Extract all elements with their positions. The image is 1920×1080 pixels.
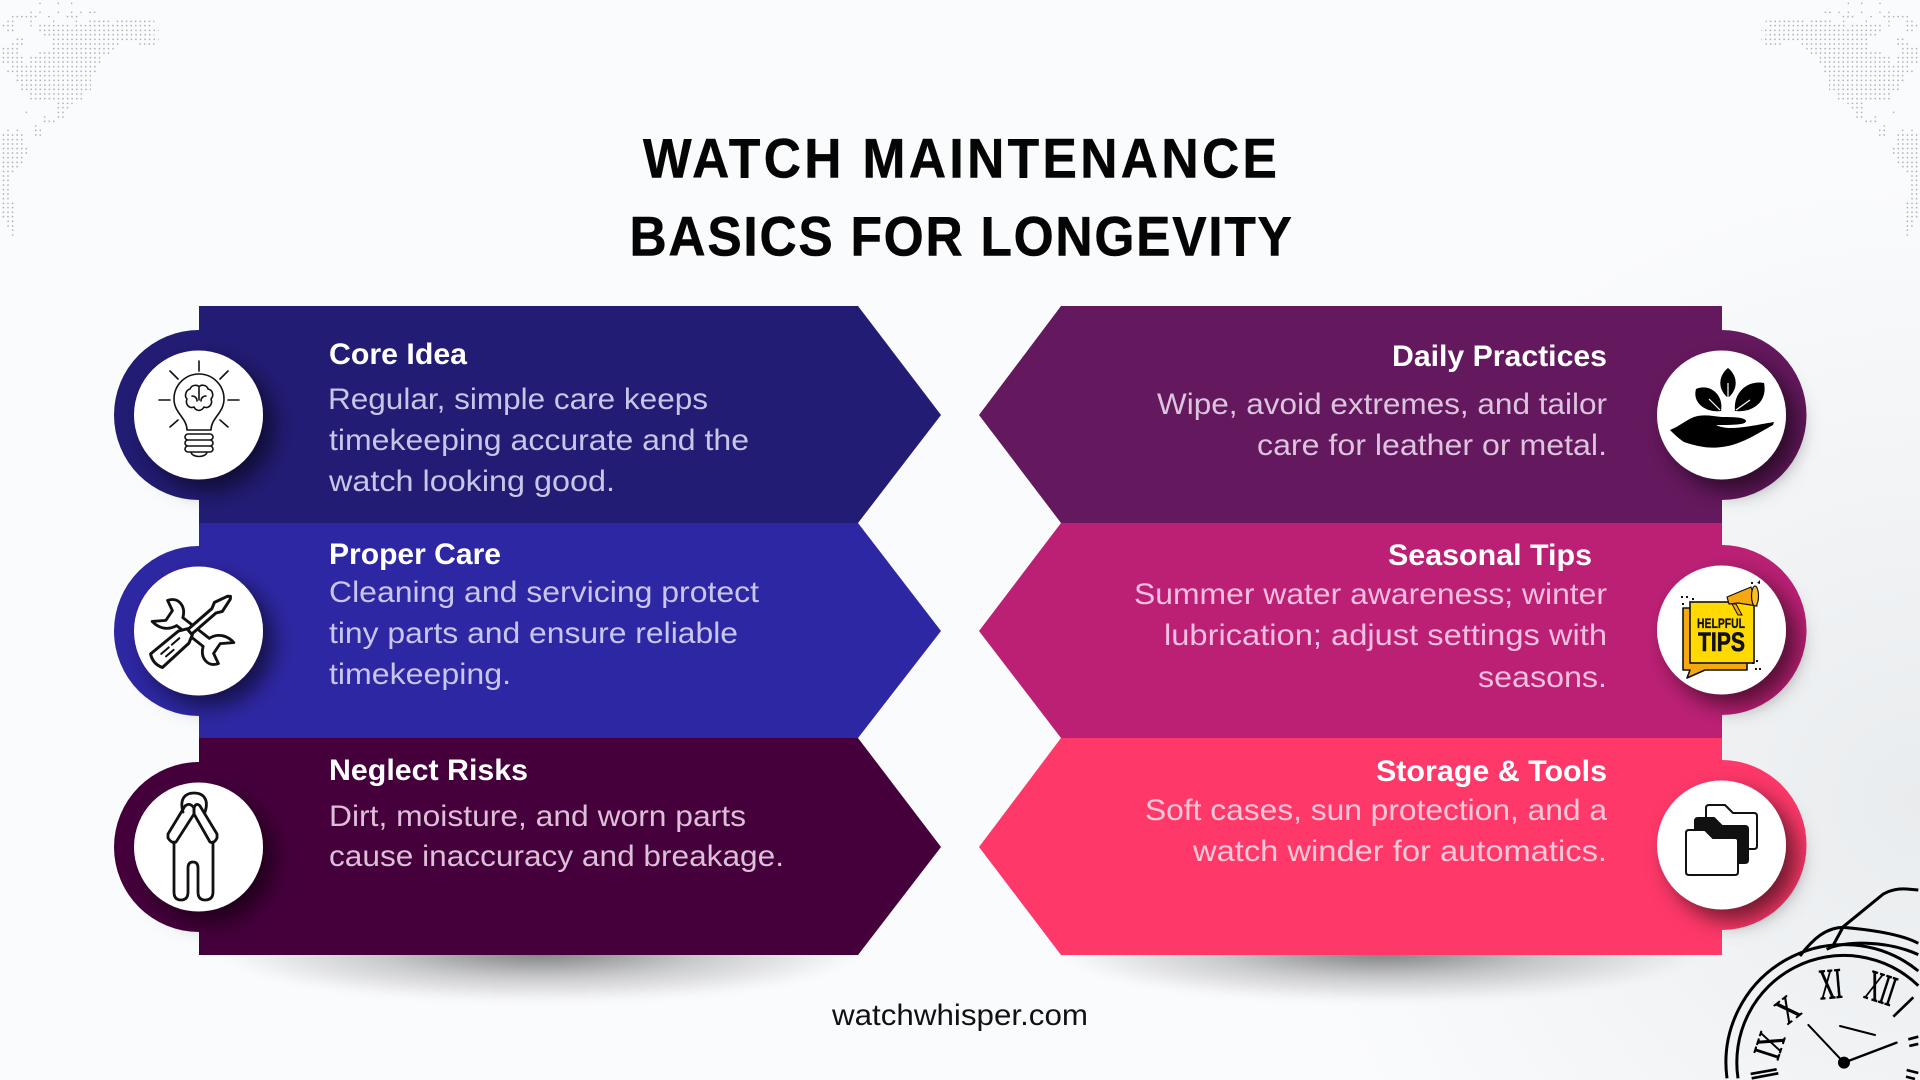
text: seasonal tips body: Summer water awareness; winter	[1134, 578, 1607, 611]
text: daily practices body: Wipe, avoid extremes, and tailor	[1157, 388, 1607, 421]
heading: proper care: Proper Care	[329, 538, 501, 571]
icon: helpful tips speech bubble with megaphone	[1681, 580, 1761, 678]
icon: stacked folders	[1686, 805, 1757, 875]
illustration: watch face corner: X	[1767, 987, 1808, 1032]
text: seasonal tips body: lubrication; adjust settings with	[1164, 619, 1607, 652]
icon: distressed person covering face	[168, 793, 217, 900]
icon: light bulb with brain	[159, 361, 239, 456]
decorative dotted world map: top right	[1761, 3, 1917, 235]
text: neglect risks body	[329, 800, 784, 873]
text: daily practices body	[1157, 388, 1607, 462]
title: BASICS FOR LONGEVITY	[630, 206, 1292, 268]
heading: daily practices: Daily Practices	[1392, 340, 1607, 373]
panel: proper care	[114, 523, 941, 738]
title	[630, 128, 1292, 268]
text: seasonal tips body	[1134, 578, 1607, 694]
panel: core idea	[114, 306, 941, 523]
text: storage and tools body: Soft cases, sun protection, and a	[1145, 794, 1607, 827]
illustration: watch face corner	[1726, 889, 1918, 1079]
text: core idea body	[328, 383, 749, 498]
illustration: watch face corner: XII	[1860, 962, 1902, 1016]
text: daily practices body: care for leather or metal.	[1257, 429, 1607, 462]
panel: daily practices	[979, 306, 1806, 523]
icon: crossed wrench and screwdriver	[149, 592, 235, 670]
heading: core idea: Core Idea	[329, 338, 467, 371]
icon: helpful tips speech bubble with megaphone: TIPS	[1698, 627, 1745, 657]
panel: storage and tools	[979, 738, 1806, 955]
shadow under right column	[1060, 902, 1700, 1002]
panel: seasonal tips	[979, 523, 1806, 738]
title: WATCH MAINTENANCE	[643, 128, 1277, 190]
text: storage and tools body: watch winder for automatics.	[1192, 835, 1607, 868]
panel: neglect risks	[114, 738, 941, 955]
text: neglect risks body: Dirt, moisture, and worn parts	[329, 800, 746, 833]
clock hands	[1808, 1025, 1897, 1069]
text: proper care body: tiny parts and ensure reliable	[329, 617, 738, 650]
text: storage and tools body	[1145, 794, 1607, 868]
heading: neglect risks: Neglect Risks	[329, 754, 528, 787]
text: proper care body	[329, 576, 760, 691]
icon: hand holding plant	[1670, 368, 1774, 448]
text: seasonal tips body: seasons.	[1478, 661, 1607, 694]
text: core idea body: Regular, simple care keeps	[328, 383, 708, 416]
icon: helpful tips speech bubble with megaphone: HELPFUL	[1697, 615, 1745, 631]
text: neglect risks body: cause inaccuracy and breakage.	[329, 840, 784, 873]
text: core idea body: timekeeping accurate and the	[329, 424, 749, 457]
illustration: watch face corner: XI	[1817, 960, 1844, 1009]
text: proper care body: Cleaning and servicing protect	[329, 576, 760, 609]
decorative dotted world map: top left	[3, 3, 159, 235]
text: proper care body: timekeeping.	[329, 658, 511, 691]
heading: storage and tools: Storage & Tools	[1376, 755, 1607, 788]
shadow under left column	[220, 902, 860, 1002]
text: core idea body: watch looking good.	[328, 465, 615, 498]
footer website label: watchwhisper.com	[831, 999, 1088, 1032]
heading: seasonal tips: Seasonal Tips	[1388, 539, 1592, 572]
illustration: watch face corner: IX	[1744, 1027, 1794, 1064]
